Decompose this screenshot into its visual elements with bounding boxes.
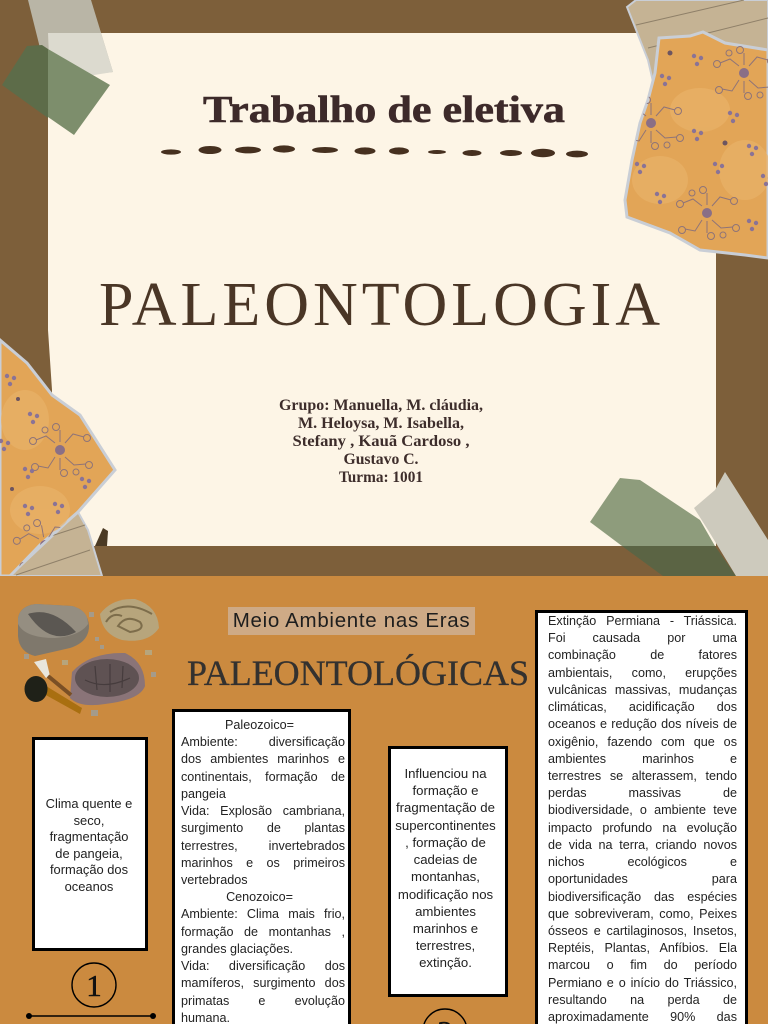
text: eras description: marinhos e os primeiros <box>181 856 345 870</box>
text: influence description: ambientes <box>415 904 476 919</box>
label: Meio Ambiente nas Eras: Meio Ambiente nas Eras <box>233 609 470 632</box>
text: eras description: Ambiente: Clima mais frio, <box>181 907 345 921</box>
tan paper bottom left <box>10 512 102 576</box>
text: eras description: terrestres, invertebrados <box>181 839 345 853</box>
tape: grey bottom right <box>694 472 768 576</box>
text: group members: Gustavo C. <box>344 451 419 468</box>
text: group members: Grupo: Manuella, M. cláudia, <box>279 397 483 414</box>
text: extinction description: nichos ecológicos e <box>548 855 737 869</box>
text: climate description: Clima quente e <box>46 796 132 811</box>
text: eras description: grandes glaciações. <box>181 942 293 956</box>
text: influence description: montanhas, <box>411 869 480 884</box>
text: climate description: seco, <box>74 812 104 828</box>
text: extinction description: terrestres se alterassem, tendo <box>548 769 737 783</box>
text: extinction description: oportunidades para <box>548 872 737 886</box>
divider: brush dashes <box>161 145 588 157</box>
text: eras description: Paleozoico= <box>225 718 294 732</box>
orange patterned paper bottom left <box>0 340 115 576</box>
text: extinction description: oxigênio, fazendo com que os <box>548 735 737 749</box>
text: eras description: mamíferos, surgimento dos <box>181 976 345 990</box>
text: extinction description: ambientes marinhos e <box>548 752 737 766</box>
text: eras description: vertebrados <box>181 873 248 887</box>
number: circle 1: 1 <box>86 968 102 1003</box>
icon: fossils and tools <box>18 599 159 716</box>
text: climate description <box>46 796 132 894</box>
text: influence description: , formação de <box>405 835 486 850</box>
stone chips <box>24 612 156 716</box>
cream paper <box>48 33 716 546</box>
text: climate description: oceanos <box>65 878 113 894</box>
text: influence description: modificação nos <box>398 887 493 902</box>
text: group members: M. Heloysa, M. Isabella, <box>298 415 464 432</box>
tape: green top left <box>2 45 110 135</box>
text: extinction description: combinação de fatores <box>548 648 737 662</box>
text: extinction description: de vida na terra, criando novos <box>548 838 737 852</box>
tape: grey top left <box>28 0 113 82</box>
text: eras description: Cenozoico= <box>226 890 293 904</box>
panel: box 1 climate <box>32 737 148 951</box>
text: extinction description: resultando na perda de <box>548 993 737 1007</box>
panel: box 2 eras <box>172 709 351 1024</box>
timeline line <box>26 1013 156 1019</box>
text: influence description: extinção. <box>419 955 472 970</box>
text: eras description: dos ambientes marinhos e <box>181 752 345 766</box>
text: extinction description: biodiversificação das espécies <box>548 890 737 904</box>
text: influence description: fragmentação de <box>396 800 495 815</box>
text: influence description <box>395 766 496 970</box>
text: extinction description: biodiversidade, o ambiente teve <box>548 803 737 817</box>
text: influence description: marinhos e <box>413 921 478 936</box>
text: climate description: fragmentação <box>50 829 128 844</box>
text: influence description: cadeias de <box>414 852 477 867</box>
dark scrap bottom left <box>95 528 108 546</box>
text: extinction description: vulcânicas massivas, mudanças <box>548 683 737 697</box>
title: Trabalho de eletiva: Trabalho de eletiva <box>203 89 565 131</box>
number: circle 2 <box>423 1008 467 1024</box>
text: extinction description: que sobreviveram, como, Peixes <box>548 907 737 921</box>
text: eras description: pangeia <box>181 787 226 801</box>
text: extinction description: climáticas, acidificação dos <box>548 700 737 714</box>
tan paper top right <box>627 0 768 90</box>
text: extinction description: Foi causada por uma <box>548 631 737 645</box>
fossil: leaf stone <box>18 604 89 656</box>
tool: hammer <box>24 676 82 714</box>
number: circle 1 <box>71 962 117 1008</box>
text: extinction description: oceanos e redução dos níveis de <box>548 717 737 731</box>
text: extinction description: Reptéis, Plantas, Anfíbios. Ela <box>548 941 737 955</box>
text: extinction description: impacto profundo na evolução <box>548 821 737 835</box>
text: influence description: Influenciou na <box>404 766 487 781</box>
tool: brush <box>34 659 71 695</box>
heading: PALEONTOLOGIA: PALEONTOLOGIA <box>99 271 660 339</box>
text: group members: Stefany , Kauã Cardoso , <box>292 433 470 450</box>
background: brown <box>0 0 768 576</box>
text: influence description: supercontinentes <box>395 818 496 833</box>
text: extinction description: aproximadamente 90% das <box>548 1010 737 1024</box>
text: eras description: continentais, formação de <box>181 770 345 784</box>
text: extinction description: Extinção Permiana - Triássica. <box>548 614 737 628</box>
tape: green bottom right <box>590 478 736 576</box>
heading: PALEONTOLÓGICAS: PALEONTOLÓGICAS <box>187 653 529 693</box>
orange patterned paper top right <box>620 32 768 258</box>
text: group members <box>279 397 483 486</box>
text: climate description: de pangeia, <box>55 846 123 860</box>
text: eras description: Vida: diversificação dos <box>181 959 345 973</box>
text: influence description: terrestres, <box>416 938 475 953</box>
panel: box 3 influence <box>388 746 508 997</box>
text: extinction description: Permiano e o início do Triássico, <box>548 976 737 990</box>
text: influence description: formação e <box>412 783 478 798</box>
text: extinction description: ósseos e cartilaginosos, Insetos, <box>548 924 737 938</box>
text: group members: Turma: 1001 <box>339 469 423 486</box>
text: extinction description: marcou o fim do período <box>548 958 737 972</box>
panel: cover page <box>0 0 768 576</box>
text: eras description: surgimento de plantas <box>181 821 345 835</box>
text: eras description: Ambiente: diversificação <box>181 735 345 749</box>
fossil: trilobite stone <box>70 653 145 705</box>
panel: box 4 extinction <box>535 610 748 1024</box>
text: climate description: formação dos <box>50 862 128 877</box>
panel: lower section background <box>0 576 768 1024</box>
text: extinction description: perdas massivas de <box>548 786 737 800</box>
fossil: ammonite <box>100 599 159 641</box>
text: extinction description: ambientais, como, erupções <box>548 666 737 680</box>
text: eras description <box>181 718 345 1024</box>
text: eras description: primatas e evolução <box>181 994 345 1008</box>
text: eras description: formação de montanhas , <box>181 925 345 939</box>
text: eras description: Vida: Explosão cambriana, <box>181 804 345 818</box>
text: extinction description <box>548 614 737 1024</box>
